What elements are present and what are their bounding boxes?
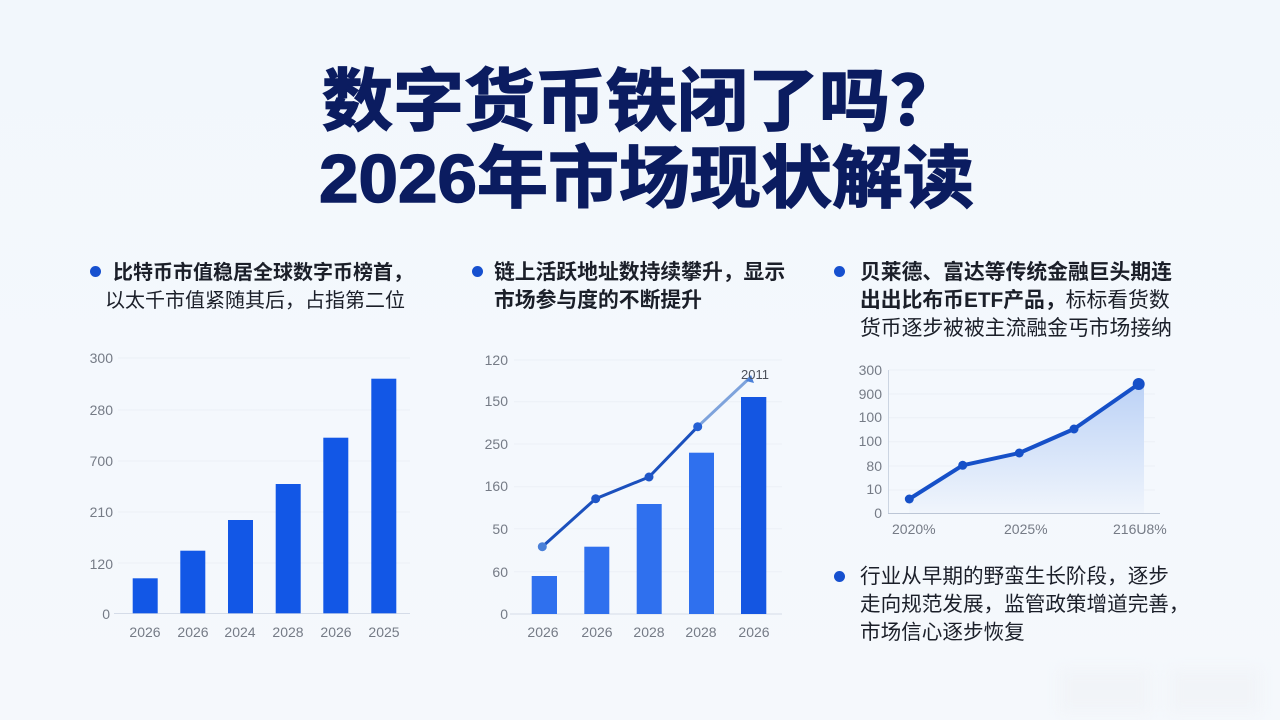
area chart: ETF adoption: 216U8% bbox=[1113, 521, 1167, 537]
bar chart: market cap: 280 bbox=[90, 402, 113, 418]
area chart: ETF adoption: 900 bbox=[859, 386, 882, 402]
combo chart: active addresses: 2026 bbox=[581, 624, 613, 640]
bullet text: market cap: 以太千市值紧随其后，占指第二位 bbox=[105, 290, 405, 312]
bullet text: ETF products: 货币逐步被被主流融金丐市场接纳 bbox=[860, 317, 1172, 340]
combo chart: active addresses: 160 bbox=[485, 478, 508, 494]
area chart: ETF adoption: 2025% bbox=[1004, 521, 1048, 537]
panel: ETF adoption bbox=[834, 260, 1172, 340]
combo chart: active addresses: 2026 bbox=[527, 624, 559, 640]
combo chart: active addresses: 50 bbox=[492, 521, 508, 537]
bullet text: market cap bbox=[90, 262, 413, 312]
area chart: ETF adoption: 2020% bbox=[892, 521, 936, 537]
combo chart: active addresses: 250 bbox=[485, 436, 508, 452]
combo chart: active addresses: 0 bbox=[500, 606, 508, 622]
bar chart: market cap: 300 bbox=[90, 350, 113, 366]
bullet text: ETF products: 贝莱德、富达等传统金融巨头期连 bbox=[860, 261, 1172, 284]
bullet text: active addresses bbox=[472, 260, 785, 312]
combo chart: active addresses: 60 bbox=[492, 564, 508, 580]
combo chart: active addresses: 2026 bbox=[738, 624, 770, 640]
bullet text: regulation bbox=[834, 565, 1190, 644]
bullet text: active addresses: 市场参与度的不断提升 bbox=[494, 289, 702, 312]
bar chart: market cap bbox=[90, 350, 410, 640]
area chart: ETF adoption bbox=[859, 362, 1167, 537]
bullet text: ETF products bbox=[834, 260, 1172, 340]
area chart: ETF adoption: 10 bbox=[866, 481, 882, 497]
title: 数字货币铁闭了吗？ bbox=[322, 65, 961, 140]
bullet text: regulation: 行业从早期的野蛮生长阶段，逐步 bbox=[860, 565, 1169, 588]
bar chart: market cap: 2024 bbox=[224, 624, 256, 640]
panel: on-chain addresses bbox=[472, 260, 785, 312]
panel: regulation bbox=[834, 565, 1190, 644]
bar chart: market cap: 700 bbox=[90, 453, 113, 469]
bar chart: market cap: 2028 bbox=[272, 624, 304, 640]
bar chart: market cap: 120 bbox=[90, 556, 113, 572]
bar chart: market cap: 0 bbox=[102, 606, 110, 622]
bullet text: active addresses: 链上活跃地址数持续攀升，显示 bbox=[494, 261, 785, 284]
bar chart: market cap: 2026 bbox=[177, 624, 209, 640]
title: 2026年市场现状解读 bbox=[319, 142, 974, 217]
decorative faded watermark bbox=[1060, 670, 1260, 712]
bullet text: regulation: 市场信心逐步恢复 bbox=[860, 621, 1025, 644]
area chart: ETF adoption: 100 bbox=[859, 409, 882, 425]
area chart: ETF adoption: 0 bbox=[874, 505, 882, 521]
area chart: ETF adoption: 100 bbox=[859, 433, 882, 449]
bar chart: market cap: 210 bbox=[90, 504, 113, 520]
bullet text: ETF products: 出出比布币ETF产品，标标看货数 bbox=[860, 289, 1170, 312]
panel: market cap bbox=[90, 262, 413, 312]
combo chart: active addresses: 150 bbox=[485, 393, 508, 409]
bar chart: market cap: 2026 bbox=[320, 624, 352, 640]
combo chart: active addresses: 120 bbox=[485, 352, 508, 368]
area chart: ETF adoption: 300 bbox=[859, 362, 882, 378]
title bbox=[319, 65, 974, 217]
bar chart: market cap: 2026 bbox=[129, 624, 161, 640]
combo chart: active addresses: 2011 bbox=[741, 367, 769, 382]
combo chart: active addresses: 2028 bbox=[685, 624, 717, 640]
bar chart: market cap: 2025 bbox=[368, 624, 400, 640]
bullet text: market cap: 比特币市值稳居全球数字币榜首， bbox=[113, 262, 413, 284]
combo chart: active addresses bbox=[485, 352, 782, 640]
combo chart: active addresses: 2028 bbox=[633, 624, 665, 640]
bullet text: regulation: 走向规范发展，监管政策增道完善， bbox=[860, 593, 1190, 616]
area chart: ETF adoption: 80 bbox=[866, 458, 882, 474]
